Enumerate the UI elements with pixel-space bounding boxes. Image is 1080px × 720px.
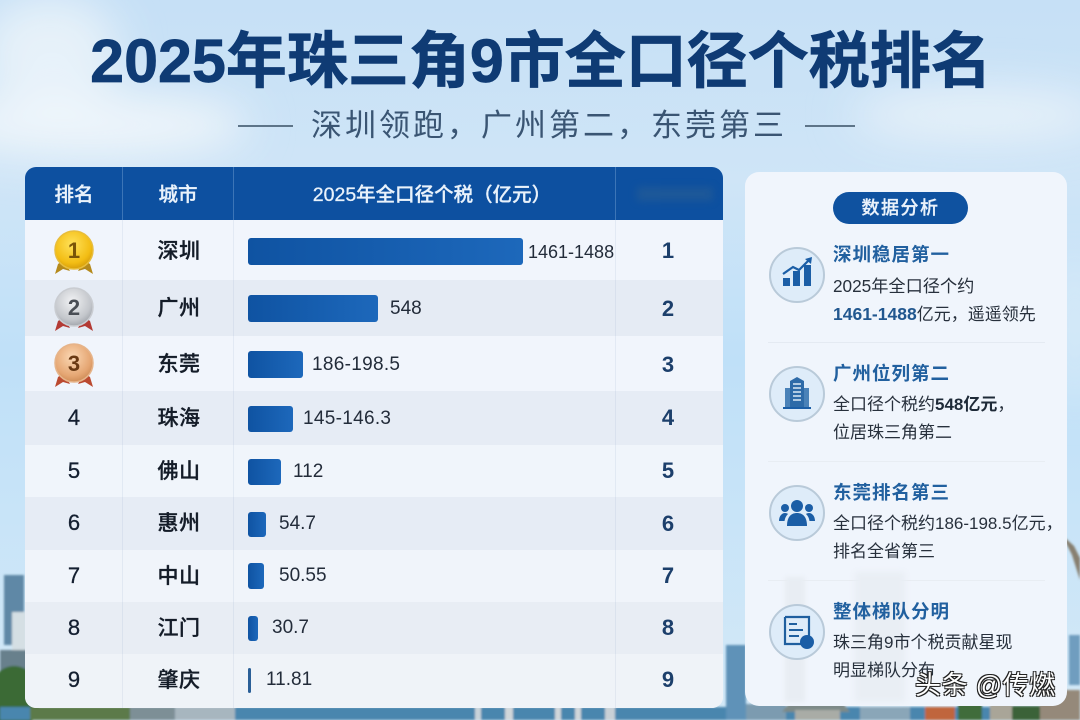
icon: people group bbox=[769, 485, 825, 541]
row 4: 珠海: 4 bbox=[662, 405, 674, 430]
row 5: 佛山: 5 bbox=[68, 458, 80, 483]
row 1: 深圳 bbox=[158, 238, 674, 265]
row 3: 东莞 bbox=[158, 351, 674, 378]
item 3: 东莞排名第三: 全口径个税约186-198.5亿元， bbox=[833, 514, 1063, 533]
icon: office building bbox=[769, 366, 825, 422]
item 1: 深圳稳居第一: 2025年全口径个约 bbox=[833, 276, 974, 296]
row 5: 佛山: 112 bbox=[293, 461, 323, 482]
row 7: 中山: 中山 bbox=[158, 565, 200, 588]
item 2: 广州位列第二: 广州位列第二 bbox=[833, 363, 950, 384]
row 1: 深圳: 1 bbox=[662, 238, 674, 263]
row 5: 佛山: 5 bbox=[662, 458, 674, 483]
icon: bronze medal rank 3: 3 bbox=[68, 351, 80, 376]
row 7: 中山: 7 bbox=[68, 563, 80, 588]
item 2: 广州位列第二 bbox=[833, 363, 1014, 442]
icon: bronze medal rank 3 bbox=[54, 343, 94, 387]
row 8: 江门: 8 bbox=[662, 615, 674, 640]
row 5: 佛山: 佛山 bbox=[158, 460, 200, 483]
item 3: 东莞排名第三: 东莞排名第三 bbox=[833, 482, 950, 503]
item 4: 整体梯队分明: 整体梯队分明 bbox=[833, 601, 950, 622]
icon: document report bbox=[769, 604, 825, 660]
row 1: 深圳: 深圳 bbox=[158, 240, 200, 263]
row 8: 江门: 30.7 bbox=[272, 617, 309, 638]
row 7: 中山 bbox=[68, 563, 674, 589]
item 4: 整体梯队分明: 珠三角9市个税贡献星现 bbox=[833, 633, 1012, 652]
heading pill: 数据分析 bbox=[833, 192, 968, 224]
panel: data analysis bbox=[745, 172, 1067, 706]
item 2: 广州位列第二: 全口径个税约548亿元， bbox=[833, 395, 1014, 414]
row 8: 江门 bbox=[68, 615, 674, 641]
icon: silver medal rank 2: 2 bbox=[68, 295, 80, 320]
row 2: 广州: 548 bbox=[390, 298, 422, 319]
row 4: 珠海: 珠海 bbox=[158, 407, 200, 430]
row 6: 惠州: 54.7 bbox=[279, 513, 316, 534]
row 4: 珠海: 4 bbox=[68, 405, 80, 430]
watermark: 头条 @传燃 bbox=[915, 670, 1056, 700]
row 5: 佛山 bbox=[68, 458, 674, 485]
item 3: 东莞排名第三 bbox=[833, 482, 1063, 561]
item 4: 整体梯队分明: 明显梯队分布 bbox=[833, 661, 935, 680]
row 6: 惠州 bbox=[68, 510, 674, 537]
row 1: 深圳: 1461-1488 bbox=[528, 242, 614, 262]
heading pill: 数据分析: 数据分析 bbox=[862, 198, 940, 218]
row 4: 珠海: 145-146.3 bbox=[303, 408, 391, 429]
table header bbox=[25, 167, 723, 220]
icon: silver medal rank 2 bbox=[54, 287, 94, 331]
row 9: 肇庆 bbox=[68, 667, 674, 693]
row 7: 中山: 50.55 bbox=[279, 565, 327, 586]
icon: growth chart bbox=[769, 247, 825, 303]
item 1: 深圳稳居第一: 1461-1488亿元，遥遥领先 bbox=[833, 304, 1036, 324]
icon: gold medal rank 1: 1 bbox=[68, 238, 80, 263]
row 7: 中山: 7 bbox=[662, 563, 674, 588]
icon: gold medal rank 1 bbox=[54, 230, 94, 274]
title: 2025年珠三角9市全口径个税排名 bbox=[90, 27, 992, 95]
table header: 2025年全口径个税（亿元） bbox=[313, 184, 551, 206]
row 8: 江门: 江门 bbox=[158, 617, 200, 640]
subtitle: 深圳领跑，广州第二，东莞第三 bbox=[311, 108, 787, 143]
row 2: 广州 bbox=[158, 295, 674, 322]
row 9: 肇庆: 9 bbox=[662, 667, 674, 692]
item 1: 深圳稳居第一: 深圳稳居第一 bbox=[833, 244, 950, 265]
row 6: 惠州: 6 bbox=[68, 510, 80, 535]
row 9: 肇庆: 9 bbox=[68, 667, 80, 692]
row 6: 惠州: 惠州 bbox=[158, 512, 200, 535]
item 3: 东莞排名第三: 排名全省第三 bbox=[833, 542, 935, 561]
row 9: 肇庆: 11.81 bbox=[266, 669, 312, 690]
panel: ranking table bbox=[25, 167, 723, 708]
row 9: 肇庆: 肇庆 bbox=[158, 669, 200, 692]
table header: 城市 bbox=[158, 184, 198, 206]
row 4: 珠海 bbox=[68, 405, 674, 432]
item 4: 整体梯队分明 bbox=[833, 601, 1012, 680]
item 2: 广州位列第二: 位居珠三角第二 bbox=[833, 423, 952, 442]
row 2: 广州: 广州 bbox=[158, 297, 200, 320]
row 3: 东莞: 3 bbox=[662, 352, 674, 377]
row 2: 广州: 2 bbox=[662, 296, 674, 321]
item 1: 深圳稳居第一 bbox=[833, 244, 1036, 324]
row 3: 东莞: 东莞 bbox=[158, 353, 200, 376]
row 8: 江门: 8 bbox=[68, 615, 80, 640]
row 3: 东莞: 186-198.5 bbox=[312, 354, 400, 375]
table header: 排名 bbox=[54, 184, 94, 206]
row 6: 惠州: 6 bbox=[662, 511, 674, 536]
